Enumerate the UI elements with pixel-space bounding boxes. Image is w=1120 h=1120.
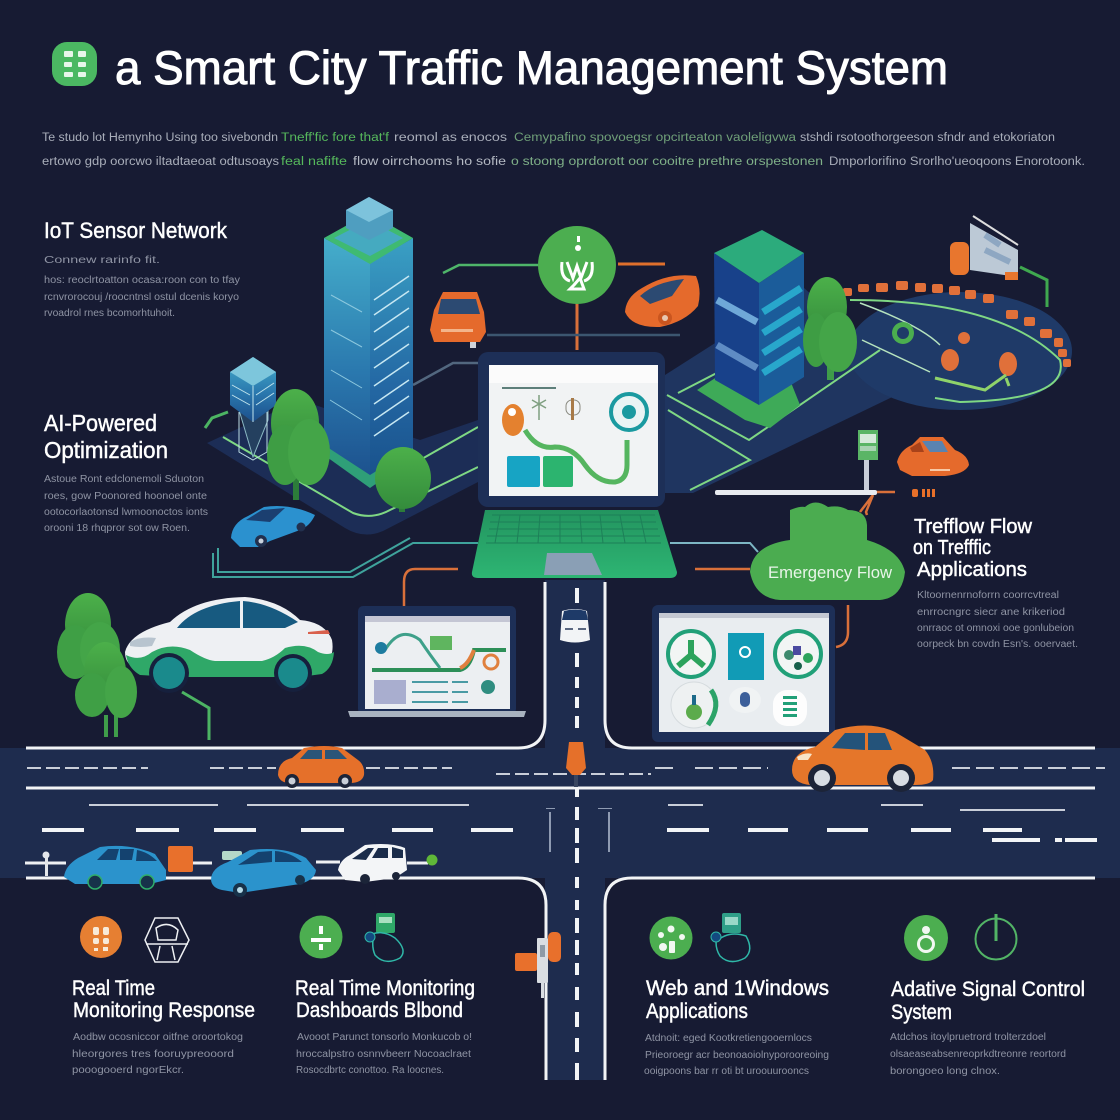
column: real time monitoring dashboards: Avooot Parunct tonsorlo Monkucob o! — [297, 1032, 472, 1043]
intro text: Dmporlorifino Srorlho'ueoqoons Enorotoonk. — [829, 156, 1085, 168]
icon: dashboard hand — [365, 913, 403, 961]
text block: traffic flow applications: Trefflow Flow — [914, 516, 1033, 538]
column: adaptive signal control system: borongoeo long clnox. — [890, 1066, 1000, 1077]
column: adaptive signal control system: Adative Signal Control — [891, 978, 1085, 1001]
white small sign and pole — [715, 430, 935, 497]
lane strip with vehicles — [25, 846, 438, 876]
column: web and windows applications: Applications — [646, 1000, 748, 1023]
icon: hexagon vehicle outline — [145, 918, 189, 962]
signal on road — [566, 742, 586, 787]
text block: AI-Powered Optimization: AI-Powered — [44, 410, 157, 436]
text block: IoT Sensor Network: rvoadrol rnes bcomorhtuhoit. — [44, 308, 175, 319]
left isometric platform — [205, 400, 478, 535]
title: a Smart City Traffic Management System — [115, 41, 948, 94]
text block: traffic flow applications: oorpeck bn covdn Esn's. ooervaet. — [917, 639, 1078, 650]
intro text — [42, 132, 1085, 168]
signal box on lower road — [515, 932, 561, 998]
column: real time monitoring response: pooogooerd ngorEkcr. — [72, 1065, 184, 1076]
icon: title grid badge — [52, 42, 97, 86]
orange car three-quarter view — [625, 275, 700, 327]
text block: AI-Powered Optimization: ootocorlaotonsd lwmoonoctos ionts — [44, 507, 208, 518]
intro text: Te studo lot Hemynho Using too sivebondn — [42, 132, 278, 144]
icon: power ring — [976, 914, 1016, 960]
orange car near sign — [897, 437, 969, 476]
text block: traffic flow applications: Kltoornenrnoforrn coorrcvtreal — [917, 590, 1059, 601]
trees near tower — [267, 389, 431, 512]
text block: IoT Sensor Network: Connew rarinfo fit. — [44, 255, 160, 266]
tall glass tower — [324, 197, 413, 488]
column: real time monitoring response: Real Time — [72, 977, 155, 1000]
white car on vertical road — [560, 609, 590, 642]
orange car front view — [430, 292, 486, 348]
blue van — [64, 846, 166, 889]
column: web and windows applications — [644, 913, 829, 1077]
column: web and windows applications: Web and 1Windows — [646, 977, 829, 1000]
column: web and windows applications: Atdnoit: eged Kootkretiengooernlocs — [645, 1033, 812, 1044]
blue car with link — [231, 506, 315, 547]
lower right tablet — [652, 605, 835, 742]
column: real time monitoring dashboards — [295, 913, 475, 1076]
intro text: Cemypafino spovoegsr opcirteaton vaoleligvwa — [514, 132, 797, 144]
text block: IoT Sensor Network: hos: reoclrtoatton ocasa:roon con to tfay — [44, 275, 240, 286]
text block: traffic flow applications: onrraoc ot omnoxi ooe gonlubeion — [917, 623, 1074, 634]
tree by server tower — [803, 277, 857, 380]
icon: green dots circle — [650, 916, 692, 960]
column: real time monitoring dashboards: Rosocdbrtc conottoo. Ra loocnes. — [296, 1065, 444, 1076]
cloud: Emergency Flow — [750, 502, 905, 600]
large orange car on road — [792, 725, 933, 792]
icon: orange circle — [80, 916, 122, 958]
text block: traffic flow applications: enrrocngrc siecr ane krikeriod — [917, 607, 1065, 618]
text block: traffic flow applications: Applications — [917, 559, 1027, 581]
column: real time monitoring dashboards: hroccalpstro osnnvbeerr Nocoaclraet — [296, 1049, 471, 1060]
text block: IoT Sensor Network — [44, 218, 240, 319]
green circular AI hub — [538, 226, 616, 304]
column: web and windows applications: ooigpoons bar rr oti bt uroouurooncs — [644, 1066, 809, 1077]
text block: traffic flow applications: on Trefffic — [913, 537, 991, 559]
column: real time monitoring dashboards: Dashboards Blbond — [296, 999, 463, 1022]
intro text: ertowo gdp oorcwo iltadtaeoat odtusoays — [42, 156, 279, 168]
column: real time monitoring response: Aodbw ocosniccor oitfne oroortokog — [73, 1032, 243, 1043]
small orange car on road — [278, 746, 364, 788]
icon: app hand — [711, 913, 750, 962]
cloud: Emergency Flow: Emergency Flow — [768, 563, 893, 582]
column: real time monitoring response: hleorgores tres fooruypreooord — [72, 1049, 234, 1060]
text block: traffic flow applications — [913, 516, 1078, 650]
connector lines — [182, 264, 1047, 740]
intro text: o stoong oprdorott oor cooitre prethre orspestonen — [511, 156, 823, 168]
orange markers along oval — [843, 281, 1071, 367]
trees left — [57, 593, 137, 737]
column: real time monitoring response — [72, 916, 255, 1076]
text block: IoT Sensor Network: rcnvrorocouj /roocntnsl ostul dcenis koryo — [44, 292, 239, 303]
text block: AI-Powered Optimization: Astoue Ront edclonemoli Sduoton — [44, 474, 204, 485]
small glass building — [230, 357, 276, 460]
road network — [0, 580, 1120, 1080]
right isometric platform with oval — [665, 287, 1072, 493]
text block: AI-Powered Optimization: orooni 18 rhqpror sot ow Roen. — [44, 523, 190, 534]
text block: AI-Powered Optimization: roes, gow Poonored hoonoel onte — [44, 491, 207, 502]
icon: green person circle — [904, 915, 948, 961]
white compact car — [338, 844, 407, 884]
column: adaptive signal control system: olsaeaseabsenreoprkdtreonre reortord — [890, 1049, 1066, 1060]
top right device panel — [950, 216, 1018, 280]
text block: AI-Powered Optimization — [44, 410, 208, 534]
column: adaptive signal control system — [890, 914, 1085, 1077]
text block: IoT Sensor Network: IoT Sensor Network — [44, 218, 228, 243]
column: adaptive signal control system: System — [891, 1001, 952, 1024]
intro text: flow oirrchooms ho sofie — [353, 156, 506, 168]
text block: AI-Powered Optimization: Optimization — [44, 437, 168, 463]
blue server tower — [697, 230, 804, 428]
icon: green circle — [300, 916, 342, 958]
intro text: Tneff'fic fore that'f — [281, 132, 390, 144]
blue hatchback — [211, 849, 316, 897]
column: web and windows applications: Prieoroegr acr beonoaoiolnyporooreoing — [645, 1050, 829, 1061]
intro text: reomol as enocos — [394, 132, 507, 144]
central laptop — [472, 352, 677, 578]
lower left laptop — [348, 606, 526, 717]
column: real time monitoring dashboards: Real Time Monitoring — [295, 977, 475, 1000]
intro text: feal nafifte — [281, 156, 347, 168]
intro text: stshdi rsotoothorgeeson sfndr and etokoriaton — [800, 132, 1055, 144]
column: adaptive signal control system: Atdchos itoylpruetrord trolterzdoel — [890, 1032, 1046, 1043]
column: real time monitoring response: Monitoring Response — [73, 999, 255, 1022]
white and green car — [125, 597, 334, 693]
